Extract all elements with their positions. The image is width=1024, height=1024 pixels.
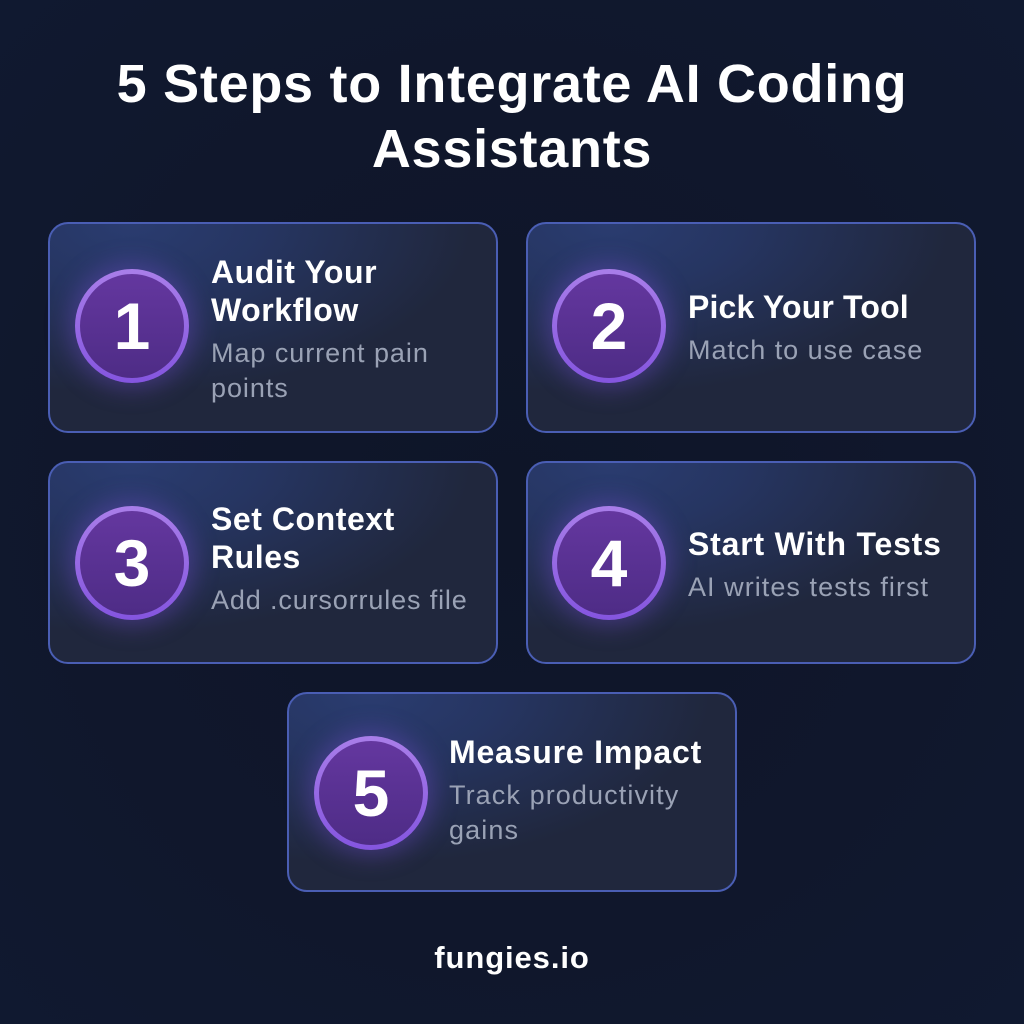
heading: step 3 [211, 501, 395, 575]
icon: number 2 [552, 269, 666, 383]
panel: step 4 [526, 461, 976, 664]
text: step 1 description: points [211, 373, 289, 403]
text: step 2 description: Match to use case [688, 335, 923, 365]
text: step 5 description: gains [449, 815, 519, 845]
icon: number 2: 2 [591, 289, 627, 363]
text: step 4 description: AI writes tests first [688, 572, 929, 602]
icon: number 1 [75, 269, 189, 383]
footer brand: fungies.io [434, 940, 590, 975]
heading: step 3: Rules [211, 539, 301, 575]
icon: number 4: 4 [591, 526, 627, 600]
icon: number 3 [75, 506, 189, 620]
text: step 1 description [211, 338, 429, 403]
heading: step 2: Pick Your Tool [688, 289, 909, 325]
panel: step 3 [48, 461, 498, 664]
text: step 1 description: Map current pain [211, 338, 429, 368]
heading: step 1: Workflow [211, 292, 359, 328]
heading: step 5: Measure Impact [449, 734, 702, 770]
heading: step 4: Start With Tests [688, 526, 942, 562]
title [117, 54, 907, 179]
panel: step 1 [48, 222, 498, 433]
title: Assistants [372, 119, 652, 179]
title: 5 Steps to Integrate AI Coding [117, 54, 907, 114]
icon: number 1: 1 [114, 289, 150, 363]
panel: step 2 [526, 222, 976, 433]
icon: number 4 [552, 506, 666, 620]
heading: step 1: Audit Your [211, 254, 377, 290]
text: step 5 description [449, 780, 679, 845]
icon: number 5 [314, 736, 428, 850]
icon: number 3: 3 [114, 526, 150, 600]
heading: step 3: Set Context [211, 501, 395, 537]
text: step 5 description: Track productivity [449, 780, 679, 810]
text: step 3 description: Add .cursorrules file [211, 585, 468, 615]
heading: step 1 [211, 254, 377, 328]
panel: step 5 [287, 692, 737, 892]
icon: number 5: 5 [353, 756, 389, 830]
